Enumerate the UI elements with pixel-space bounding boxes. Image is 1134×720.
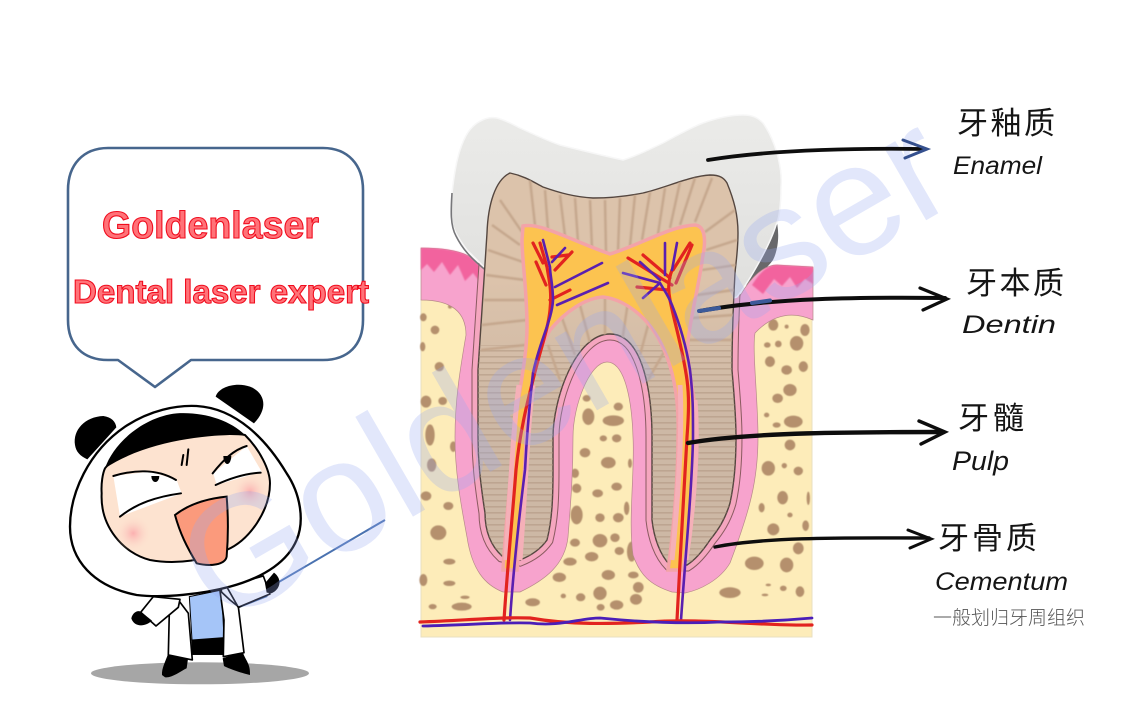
arteries [504,243,692,620]
arrow: dentin [699,288,947,311]
lab coat [141,576,270,660]
bone pores, upper area [420,305,810,375]
Chinese label: cementum: 牙骨质 [938,513,1037,558]
left ear [75,416,116,459]
coat left side [168,600,192,660]
arrow: cementum [715,530,931,548]
periodontal ligament ring [478,233,738,565]
English label: pulp: Pulp [952,446,1009,476]
blood vessels [420,240,812,626]
bubble outline [68,148,363,387]
Chinese label: enamel: 牙釉质 [957,98,1055,143]
enamel left shadow edge [451,193,488,272]
canal linings [506,385,696,560]
trousers [192,637,223,655]
label: 牙骨质 Cementum [935,513,1068,596]
panel: tooth cross-section diagram [419,115,813,637]
coat right side [220,591,244,657]
gums and periodontal tissue [421,248,813,593]
pupils [151,456,231,482]
root dentin stripes [470,345,745,570]
right ear [216,385,263,423]
eye whites [113,446,262,517]
face [102,413,270,565]
cheek left [115,515,152,552]
gum dark band, right [752,265,813,294]
label: 牙釉质 Enamel [953,98,1055,180]
feet [162,652,250,677]
dentin base [478,173,738,565]
left foot [162,653,188,677]
hood [70,406,301,596]
right hand [265,573,279,593]
ligament outline [478,233,738,565]
skin [102,434,270,562]
enamel crown [451,115,781,320]
enamel shadow, right [745,215,778,290]
panel: labels and arrows [688,98,1085,629]
shirt [189,590,224,640]
note: 一般划归牙周组织: 一般划归牙周组织 [933,607,1085,629]
open mouth [175,497,228,565]
ligament fill [478,233,738,565]
veins [510,240,693,620]
English label: dentin: Dentin [962,311,1056,339]
right foot [223,652,250,675]
eye lines [113,446,261,517]
arrow: pulp [688,421,945,444]
arrow: enamel [708,140,927,160]
hair [105,413,245,468]
Chinese label: pulp: 牙髓 [958,393,1024,438]
panel: speech bubble [68,148,369,387]
bottom vessel, red [420,618,812,625]
bone pores, lower area [419,384,810,611]
left sleeve [141,597,180,626]
panel: cartoon panda doctor [70,385,385,684]
Chinese label: dentin: 牙本质 [966,258,1064,303]
crown dentin tubules [481,178,737,380]
gum dark band, left [421,248,488,292]
cheek right [232,473,268,510]
pulp chamber and canals [503,225,704,570]
dentin [470,173,745,570]
watermark: Goldenlaser [148,75,979,657]
ears [75,385,263,459]
label: 牙髓 Pulp [952,393,1024,476]
left hand [131,611,152,625]
heading: Goldenlaser: Goldenlaser [102,205,319,247]
hands [131,573,279,625]
bottom vessel, blue [423,618,812,626]
right sleeve [227,576,270,607]
label: 牙本质 Dentin [962,258,1064,339]
English label: cementum: Cementum [935,568,1068,596]
English label: enamel: Enamel [953,152,1044,180]
bone block [421,300,812,637]
text: Dental laser expert: Dental laser expert [73,273,369,310]
pointer stick [238,520,385,607]
ground shadow [91,662,309,684]
